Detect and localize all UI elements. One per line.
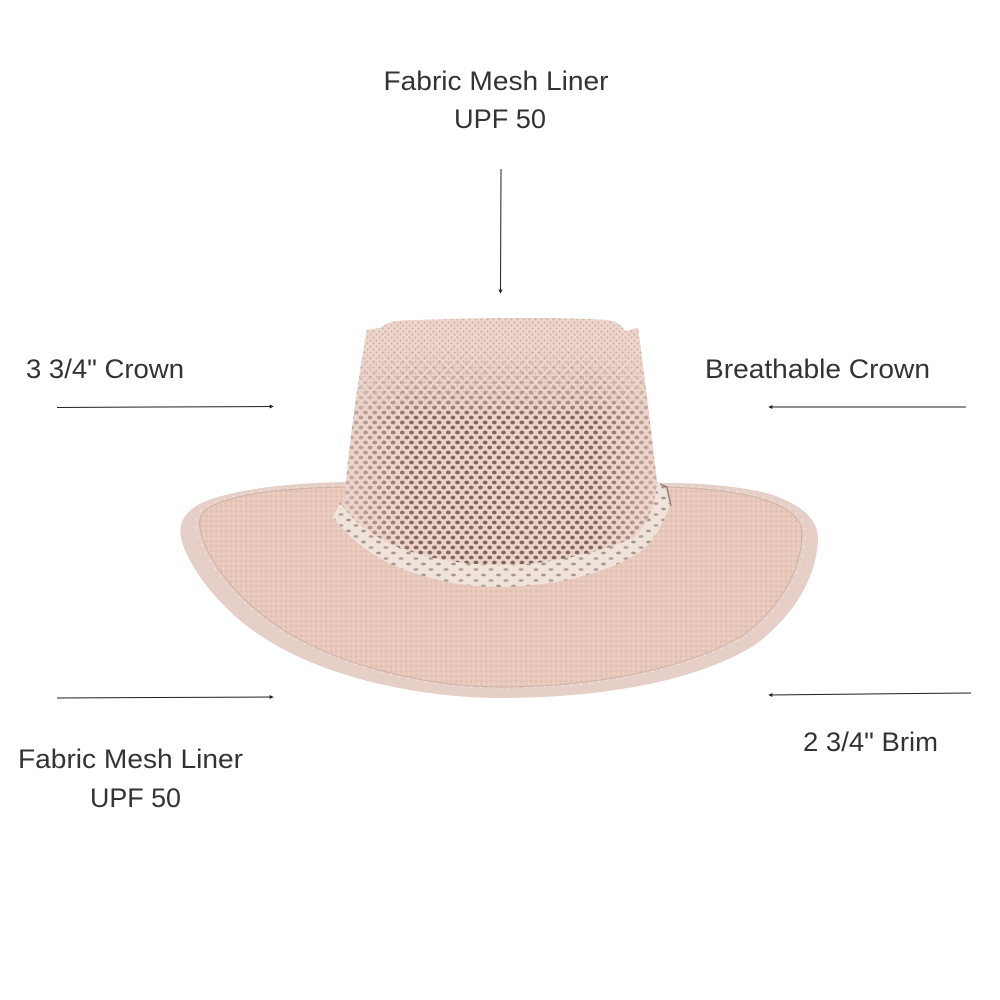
label: lower fabric mesh liner <box>18 744 243 813</box>
label: top fabric mesh liner <box>384 66 608 134</box>
arrow: crown height <box>57 406 273 408</box>
label: lower fabric mesh liner: UPF 50 <box>90 783 181 813</box>
arrow: brim width <box>769 693 971 695</box>
arrow: lower left <box>57 697 273 698</box>
label: top fabric mesh liner: UPF 50 <box>454 104 546 134</box>
arrow: breathable crown <box>769 406 966 408</box>
label: top fabric mesh liner: Fabric Mesh Liner <box>384 66 608 96</box>
illustration: mesh sun hat <box>180 318 818 698</box>
label: breathable crown: Breathable Crown <box>705 354 930 384</box>
hat crown mesh <box>338 318 664 575</box>
hat brim <box>180 482 818 698</box>
label: lower fabric mesh liner: Fabric Mesh Liner <box>18 744 243 774</box>
arrow: top <box>500 169 502 293</box>
label: brim width: 2 3/4" Brim <box>803 727 938 757</box>
label: crown height: 3 3/4" Crown <box>26 354 184 384</box>
hat band <box>333 482 671 587</box>
